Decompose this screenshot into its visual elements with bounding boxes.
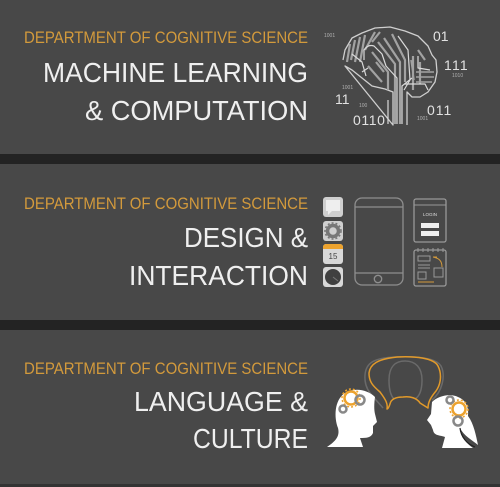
- heading: MACHINE LEARNING: [43, 57, 308, 88]
- heading: [129, 222, 308, 291]
- heading: DESIGN &: [184, 222, 308, 253]
- panel: language and culture: [24, 357, 478, 454]
- heading: INTERACTION: [129, 260, 308, 291]
- binary numbers: 1001: [342, 85, 353, 91]
- icon: login wireframe: [414, 199, 446, 242]
- binary numbers: 1001: [417, 116, 428, 122]
- icon: speech bubbles: [365, 357, 443, 409]
- binary numbers: 100: [359, 103, 368, 109]
- binary numbers: 0110: [353, 112, 386, 128]
- binary numbers: [324, 28, 469, 128]
- icon: male head: [327, 389, 377, 447]
- heading: [43, 57, 308, 126]
- binary numbers: 1010: [452, 73, 463, 79]
- heading: & COMPUTATION: [85, 95, 308, 126]
- department label: DEPARTMENT OF COGNITIVE SCIENCE: [24, 195, 308, 213]
- icon: message app: [323, 197, 343, 217]
- icon: notebook sketch: [414, 248, 446, 286]
- icon: calendar app: 15: [329, 252, 338, 261]
- binary numbers: 111: [444, 57, 469, 73]
- icon: female head: [427, 395, 478, 448]
- heading: CULTURE: [193, 423, 308, 454]
- heading: [134, 386, 308, 454]
- binary numbers: 01: [433, 28, 449, 44]
- icon: calendar app: [323, 244, 343, 264]
- icon: circuit brain: [343, 27, 437, 125]
- department label: DEPARTMENT OF COGNITIVE SCIENCE: [24, 360, 308, 378]
- binary numbers: 1001: [324, 33, 335, 39]
- binary numbers: 011: [427, 102, 452, 118]
- icon: login wireframe: LOGIN: [423, 212, 437, 217]
- icon: clock app: [323, 267, 343, 287]
- panel: machine learning: [24, 27, 469, 128]
- panel: design and interaction: [24, 195, 446, 291]
- icon: phone wireframe: [355, 198, 403, 285]
- department label: DEPARTMENT OF COGNITIVE SCIENCE: [24, 29, 308, 47]
- binary numbers: 11: [335, 91, 350, 107]
- icon: settings app: [323, 221, 343, 241]
- heading: LANGUAGE &: [134, 386, 308, 417]
